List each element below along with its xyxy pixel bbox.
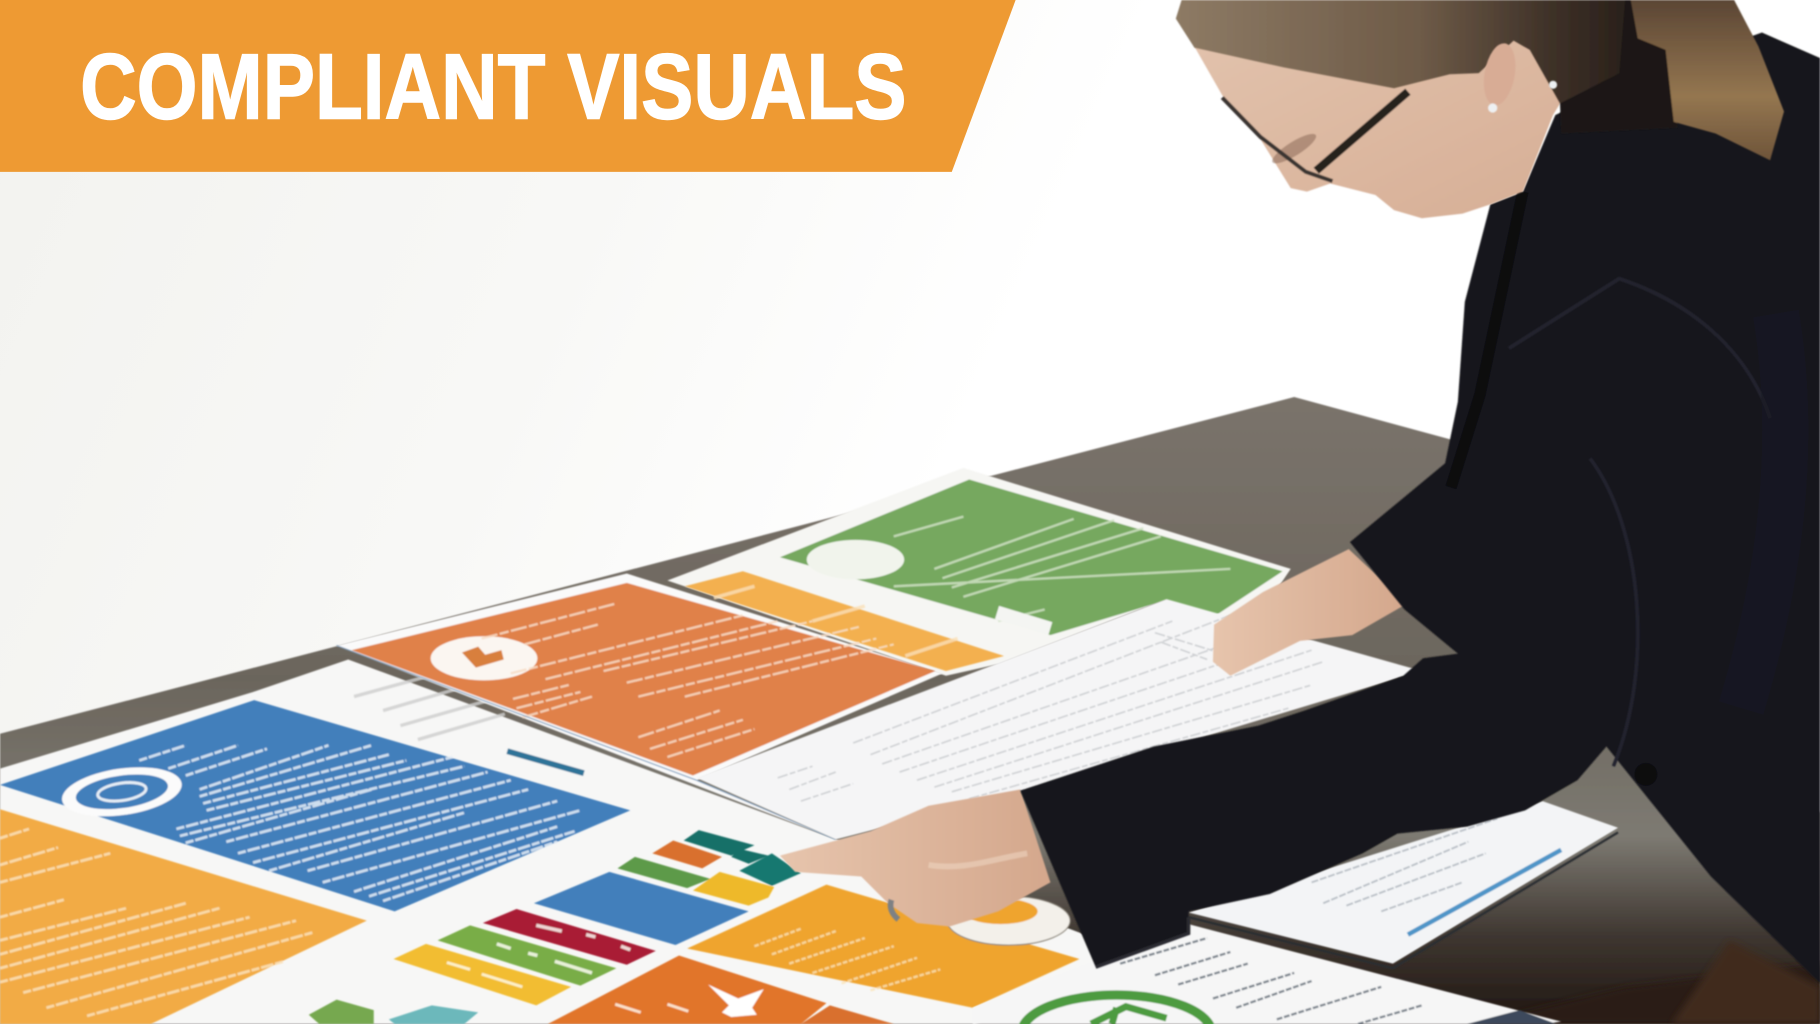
tile: green — [618, 857, 710, 888]
icon: orange poster badge — [431, 636, 537, 680]
panel: pale orange strip — [685, 571, 1004, 671]
tile: teal — [684, 830, 754, 856]
woman: jacket body — [1020, 33, 1820, 983]
document text lines — [778, 615, 1323, 801]
right document text lines — [1312, 819, 1497, 911]
bottom sheet text lines — [1120, 938, 1422, 1024]
table — [0, 397, 1820, 1024]
woman: ear and earrings — [1479, 41, 1557, 113]
panel: orange poster — [337, 574, 942, 839]
ponytail — [1631, 0, 1784, 160]
yellow sheet text lines — [754, 929, 940, 990]
woman: face and neck — [1194, 35, 1562, 218]
tile: red — [483, 909, 656, 965]
yellow poster text lines — [0, 829, 313, 1016]
panel: base white sheets — [0, 659, 1161, 1024]
jacket sleeve — [1020, 650, 1606, 967]
tile: orange large — [548, 956, 826, 1024]
tile: gold — [393, 944, 571, 1005]
tile: teal right — [739, 853, 801, 886]
icon: far hand — [1213, 549, 1407, 676]
panel: yellow poster — [0, 809, 367, 1024]
icons: folders — [309, 1000, 478, 1024]
icon: target circle — [59, 760, 185, 823]
panel: colour tile sheet — [309, 830, 894, 1024]
eye shadow — [1269, 129, 1320, 168]
tile: orange small — [652, 841, 722, 868]
panel: right white document — [1189, 801, 1618, 968]
blue progress bar — [1408, 850, 1561, 935]
icon: green poster badge — [807, 540, 904, 579]
icon: green globe — [1021, 995, 1212, 1024]
wedding ring — [891, 900, 898, 920]
title banner — [0, 0, 1016, 172]
blue poster text lines — [139, 745, 580, 901]
chart fragment — [354, 671, 505, 740]
icon: ring emblem — [947, 896, 1070, 945]
panel: blue poster — [0, 700, 630, 911]
tile: teal small — [731, 849, 768, 864]
woman: hair — [1176, 0, 1784, 160]
title: COMPLIANT VISUALS — [80, 34, 907, 138]
orange poster text lines — [482, 604, 894, 757]
glasses — [1222, 92, 1408, 181]
green poster text lines — [894, 517, 1230, 621]
icon: pointing hand — [780, 789, 1050, 926]
tile: blue — [534, 872, 749, 945]
panel: yellow sheet with ring — [687, 885, 1079, 1008]
panel: green poster — [667, 468, 1291, 676]
panel: bottom white sheet — [973, 924, 1561, 1024]
panel: white text document — [696, 599, 1422, 839]
icon: white butterfly — [708, 985, 764, 1017]
tile: light green — [438, 925, 616, 986]
tile: yellow — [693, 872, 774, 906]
